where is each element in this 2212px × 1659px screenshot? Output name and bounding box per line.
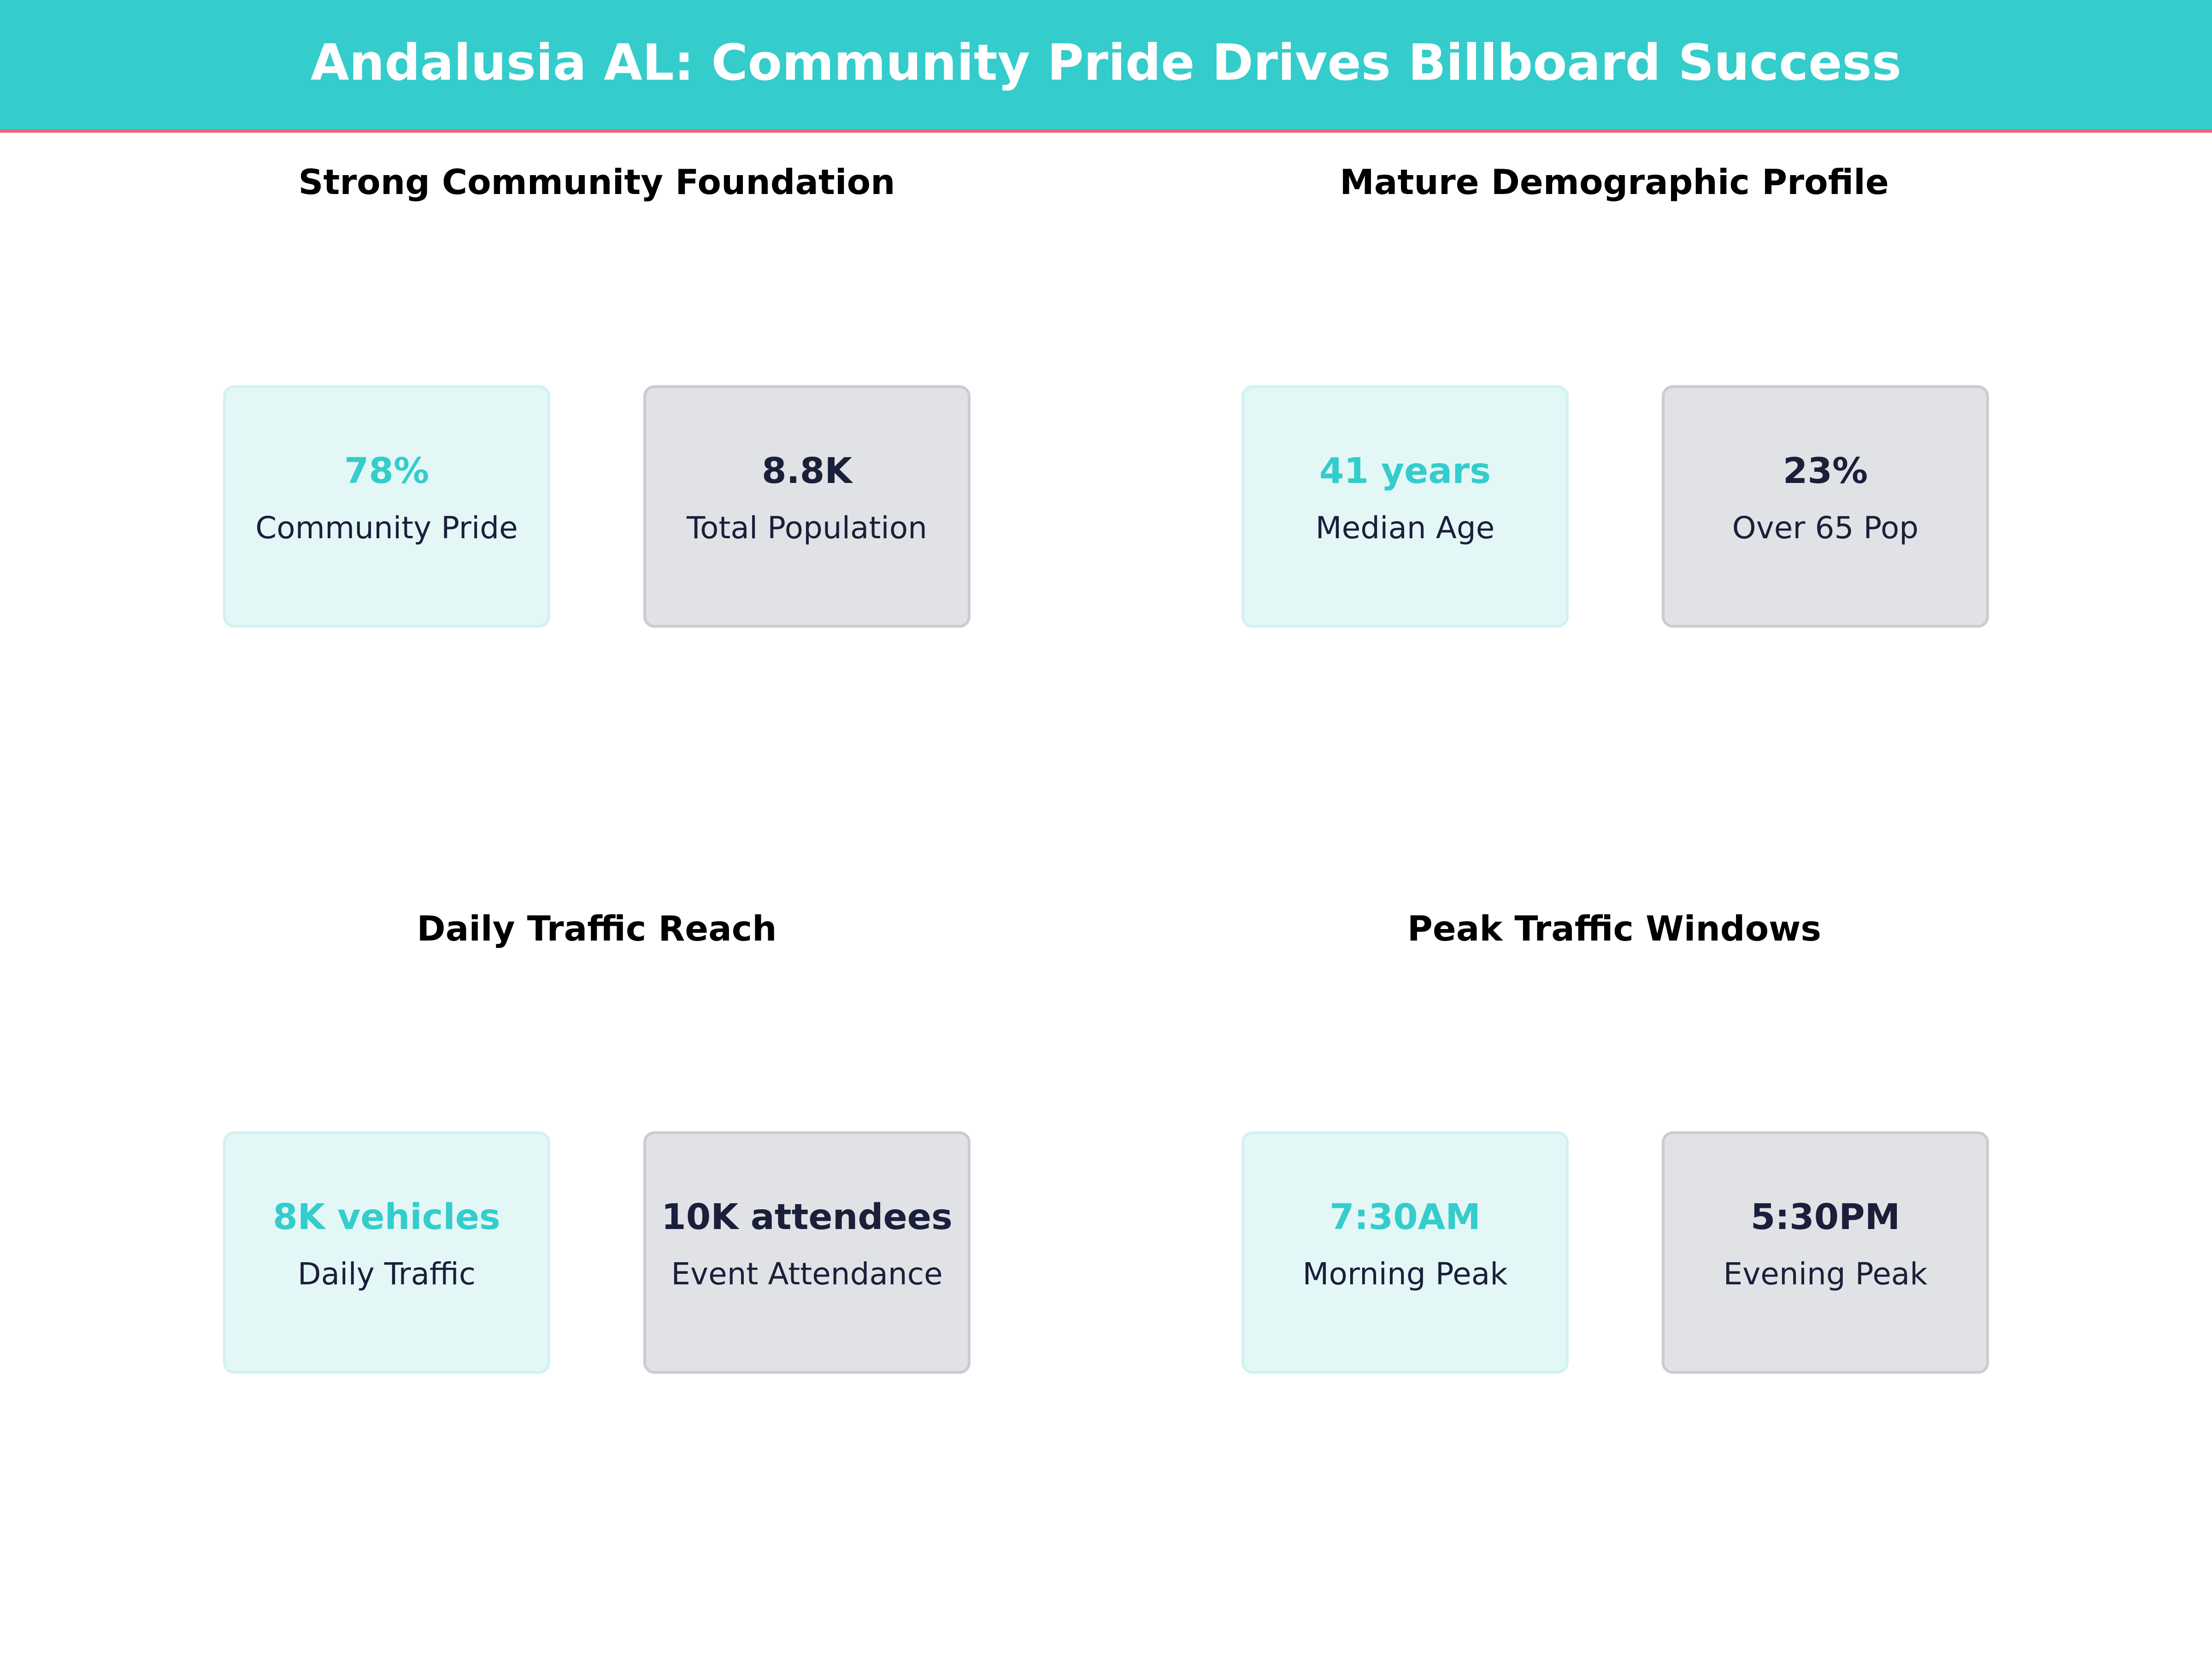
card: Event Attendance: Event Attendance [671,1256,943,1292]
panel title: Peak Traffic Windows: Peak Traffic Windows [1407,908,1821,949]
card: Event Attendance: 10K attendees [661,1197,953,1238]
card: Median Age: Median Age [1316,510,1494,546]
card: Over 65 Pop: 23% [1783,451,1868,492]
panel title: Daily Traffic Reach: Daily Traffic Reach [417,908,777,949]
card: Daily Traffic [223,1131,550,1374]
card: Evening Peak: 5:30PM [1751,1197,1900,1238]
card: Total Population [643,385,971,628]
card: Community Pride [223,385,550,628]
panel title: Strong Community Foundation: Strong Community Foundation [298,162,895,202]
card: Median Age: 41 years [1319,451,1491,492]
card: Morning Peak [1241,1131,1569,1374]
card: Over 65 Pop [1662,385,1989,628]
card: Evening Peak: Evening Peak [1724,1256,1927,1292]
card: Community Pride: 78% [344,451,429,492]
card: Morning Peak: Morning Peak [1303,1256,1507,1292]
card: Total Population: 8.8K [762,451,852,492]
card: Event Attendance [643,1131,971,1374]
card: Evening Peak [1662,1131,1989,1374]
title: Andalusia AL: Community Pride Drives Billboard Success [311,34,1901,92]
card: Morning Peak: 7:30AM [1330,1197,1481,1238]
card: Daily Traffic: 8K vehicles [273,1197,500,1238]
card: Community Pride: Community Pride [255,510,518,546]
card: Over 65 Pop: Over 65 Pop [1732,510,1918,546]
header banner [0,0,2212,133]
card: Total Population: Total Population [687,510,927,546]
card: Daily Traffic: Daily Traffic [298,1256,476,1292]
panel title: Mature Demographic Profile: Mature Demographic Profile [1340,162,1889,202]
card: Median Age [1241,385,1569,628]
